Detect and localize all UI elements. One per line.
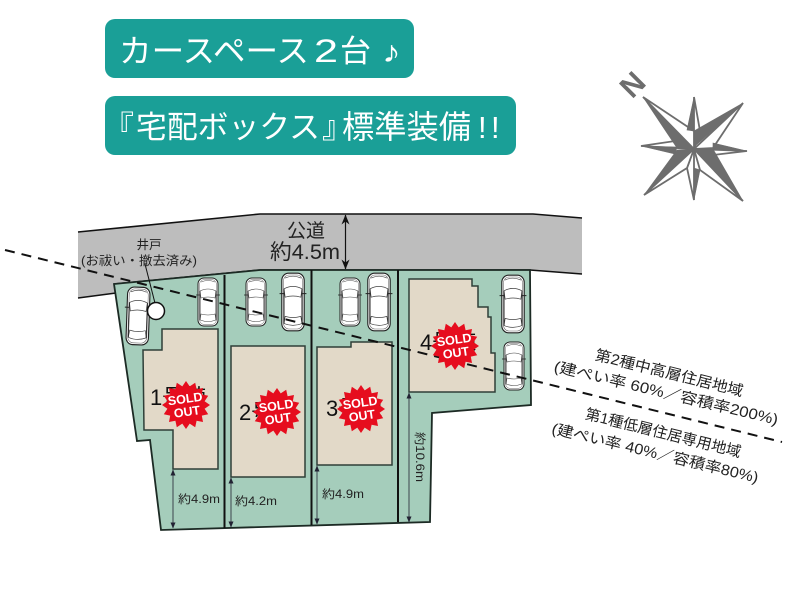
banner: delivery box standard equipment: ! <box>491 110 500 145</box>
dimension: lot 4 depth: 約10.6m <box>413 432 427 482</box>
lot dividers <box>224 270 398 528</box>
car 4 <box>280 273 306 331</box>
road label: 公道 <box>287 220 325 242</box>
car 6 <box>366 273 392 331</box>
banner: car space for 2 cars <box>105 19 414 78</box>
sold out badge 3: SOLD <box>342 394 378 412</box>
banner: car space for 2 cars: 台 <box>340 34 371 69</box>
house 3 footprint <box>317 342 392 465</box>
lot boundary <box>114 270 531 530</box>
road <box>78 214 582 298</box>
sold out badge 2: SOLD <box>258 397 294 415</box>
dimension: lot 1 setback <box>173 470 220 528</box>
banner: car space for 2 cars: カースペース <box>119 33 309 69</box>
banner: delivery box standard equipment: 』 <box>322 110 353 145</box>
compass letter N: N <box>614 66 652 104</box>
house 2 footprint <box>231 346 305 477</box>
well label: (お祓い・撤去済み) <box>81 253 197 268</box>
lot 2 number: 2号棟 <box>239 400 295 425</box>
dimension: lot 3 setback <box>317 466 364 524</box>
well label: 井戸 <box>136 238 162 252</box>
dimension: lot 4 depth <box>409 393 427 522</box>
banner: car space for 2 cars: ♪ <box>382 36 401 69</box>
site lots <box>114 270 531 530</box>
sold out badge 2 <box>253 388 301 436</box>
zoning label: type 2 mid-high residential: 第2種中高層住居地域 <box>593 347 745 400</box>
banner: delivery box standard equipment: 標準装備 <box>342 109 471 145</box>
car 5 <box>338 278 362 326</box>
sold out badge 1: OUT <box>173 403 201 421</box>
dimension: lot 3 setback: 約4.9m <box>322 487 364 501</box>
zoning label: type 1 low-rise residential: (建ぺい率 40%／容積率80%) <box>550 421 760 487</box>
lot 4 number: 4号棟 <box>420 330 476 355</box>
house 4 footprint <box>409 279 495 392</box>
sold out badge 4: OUT <box>442 344 470 362</box>
sold out badge 1 <box>162 381 210 429</box>
compass star <box>641 97 747 201</box>
zoning label: type 1 low-rise residential: 第1種低層住居専用地域 <box>583 406 743 461</box>
car 3 <box>244 278 268 326</box>
car 2 <box>196 278 220 326</box>
dimension: lot 1 setback: 約4.9m <box>178 492 220 506</box>
zoning boundary dashed line <box>5 250 782 442</box>
zoning label: type 2 mid-high residential <box>552 347 780 429</box>
sold out badge 3 <box>337 385 385 433</box>
zoning label: type 2 mid-high residential: (建ぺい率 60%／容積率200%) <box>552 359 780 429</box>
house 1 footprint <box>143 329 218 469</box>
sold out badge 3: OUT <box>348 407 376 425</box>
car 7 <box>500 275 526 333</box>
sold out badge 1: SOLD <box>167 390 203 408</box>
road label: 約4.5m <box>270 241 340 264</box>
house footprints <box>143 279 495 477</box>
sold out badge 4: SOLD <box>436 331 472 349</box>
banner: delivery box standard equipment: 『 <box>103 110 134 145</box>
well marker <box>145 264 164 320</box>
lot 3 number: 3号棟 <box>326 396 382 421</box>
banner: delivery box standard equipment <box>103 96 516 155</box>
sold out badge 2: OUT <box>264 410 292 428</box>
road width arrow <box>344 215 346 269</box>
parked cars <box>124 273 526 390</box>
lot 1 number: 1号棟 <box>150 385 206 410</box>
sold out badge 4 <box>431 322 479 370</box>
road label <box>270 220 340 264</box>
car 8 <box>502 342 526 390</box>
banner: car space for 2 cars: 2 <box>314 33 338 69</box>
dimension: lot 2 setback <box>231 478 277 527</box>
well label <box>81 238 197 268</box>
dimension: lot 2 setback: 約4.2m <box>235 494 277 508</box>
car 1 <box>124 287 152 345</box>
banner: delivery box standard equipment: 宅配ボックス <box>136 110 320 145</box>
compass rose with north marker <box>614 66 747 201</box>
banner: delivery box standard equipment: ! <box>478 110 487 145</box>
